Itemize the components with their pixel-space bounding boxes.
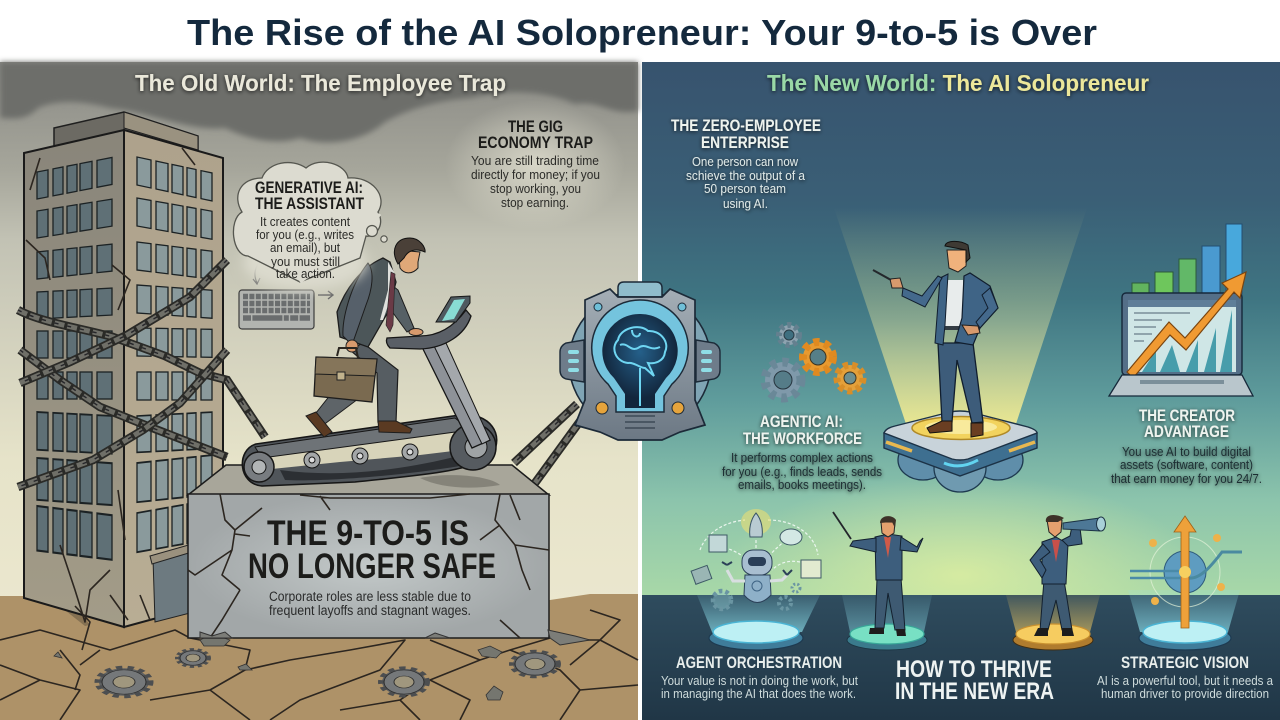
text halo: [445, 100, 625, 230]
cracked office building: [24, 112, 223, 650]
hover platform: [884, 411, 1037, 492]
top cap: [618, 282, 662, 297]
agentic body: for you (e.g., finds leads, sends: [722, 464, 882, 479]
block headline: THE 9-TO-5 IS: [267, 514, 469, 553]
assistant body: an email), but: [270, 240, 340, 255]
rubble: [54, 634, 503, 700]
gear: broken cog 4: [513, 652, 557, 676]
pill lights right: [701, 350, 712, 372]
section: agent orchestration: AGENT ORCHESTRATION: [676, 653, 842, 672]
keyboard icon: [239, 262, 333, 329]
assistant body: take action.: [276, 266, 335, 281]
callout: creator advantage: ADVANTAGE: [1144, 422, 1229, 441]
central AI brain badge: [560, 282, 720, 440]
section: agent orchestration: [661, 653, 858, 701]
callout: agentic AI: [722, 412, 882, 492]
storm clouds: [0, 62, 638, 142]
creator body: that earn money for you 24/7.: [1111, 471, 1262, 486]
gig body: stop earning.: [501, 195, 569, 210]
assistant body: [256, 214, 354, 281]
jacket right side: [955, 273, 998, 345]
man on treadmill: [306, 238, 425, 437]
gig body: [471, 153, 600, 210]
callout: creator advantage: THE CREATOR: [1139, 406, 1235, 425]
title: The Rise of the AI Solopreneur: Your 9-to-5 is Over: [187, 12, 1097, 53]
panel: the new world: [642, 62, 1280, 720]
creator body: [1111, 444, 1262, 486]
callout: the gig economy trap: [471, 117, 600, 210]
callout: zero-employee enterprise: [671, 116, 821, 211]
zero-employee body: [686, 154, 806, 211]
laptop growth chart: [1109, 224, 1253, 396]
spotlight beam: [834, 208, 1087, 430]
orchestration body: Your value is not in doing the work, but: [661, 673, 858, 688]
bulb lens: [602, 314, 678, 408]
zero-employee body: 50 person team: [704, 181, 786, 196]
main solopreneur figure: [873, 241, 998, 437]
gig body: You are still trading time: [471, 153, 599, 168]
side tab right: [696, 340, 720, 382]
pedestal: presenter with pointer: [833, 512, 932, 650]
pill lights left: [568, 350, 579, 372]
assistant heading: THE ASSISTANT: [255, 194, 365, 213]
agentic body: emails, books meetings).: [738, 477, 866, 492]
section: strategic vision: STRATEGIC VISION: [1121, 653, 1249, 672]
callout: agentic AI: THE WORKFORCE: [743, 429, 862, 448]
assistant body: It creates content: [260, 214, 350, 229]
section: strategic vision: [1097, 653, 1274, 701]
zero-employee body: using AI.: [723, 196, 768, 211]
thought bubble: generative AI: [233, 162, 387, 290]
block headline line two: NO LONGER SAFE: [248, 547, 496, 586]
assistant body: you must still: [271, 254, 340, 269]
ground: [0, 594, 638, 720]
bulb ring: [592, 300, 688, 412]
pedestal: agent orchestration with robot: [691, 509, 821, 650]
telescope: [1063, 518, 1100, 531]
panel heading: The New World: The AI Solopreneur: [767, 70, 1149, 96]
gear: broken cog 1: [99, 668, 149, 696]
gear: broken cog 3: [382, 669, 426, 695]
orchestration body: in managing the AI that does the work.: [661, 686, 856, 701]
steel housing: [575, 289, 705, 440]
gears: [765, 325, 863, 398]
far arm: [388, 282, 414, 332]
orchestration body: [661, 673, 858, 701]
treadmill: [242, 296, 497, 486]
assistant body: for you (e.g., writes: [256, 227, 354, 242]
creator body: You use AI to build digital: [1122, 444, 1251, 459]
agentic body: [722, 450, 882, 492]
gig body: directly for money; if you: [471, 167, 600, 182]
panel heading: The Old World: The Employee Trap: [135, 70, 506, 96]
panel: the old world: [0, 62, 638, 720]
briefcase: [314, 348, 377, 402]
block body: Corporate roles are less stable due to: [269, 589, 471, 604]
bottom band: [642, 595, 1280, 720]
callout: zero-employee enterprise: THE ZERO-EMPLOYEE: [671, 116, 821, 135]
concrete block: [188, 465, 590, 645]
orange rivets: [596, 402, 684, 414]
backing disc: [569, 291, 711, 433]
section heading: how to thrive: HOW TO THRIVE: [896, 656, 1052, 683]
callout: zero-employee enterprise: ENTERPRISE: [701, 133, 789, 152]
creator body: assets (software, content): [1120, 457, 1253, 472]
pedestal: visionary with telescope: [1006, 515, 1106, 650]
callout: creator advantage: [1111, 406, 1262, 486]
gear: broken cog 2: [178, 650, 208, 666]
strategic body: [1097, 673, 1274, 701]
jacket left side: [935, 274, 948, 345]
callout: agentic AI: AGENTIC AI:: [760, 412, 843, 431]
side tab left: [560, 340, 584, 382]
zero-employee body: schieve the output of a: [686, 168, 806, 183]
assistant heading: [255, 178, 365, 213]
blue rivets: [594, 303, 686, 311]
callout: the gig economy trap: ECONOMY TRAP: [478, 133, 593, 152]
block body: [269, 589, 471, 618]
icon: brain: [614, 327, 666, 406]
section heading: how to thrive: IN THE NEW ERA: [895, 678, 1054, 705]
block body: frequent layoffs and stagnant wages.: [269, 603, 471, 618]
callout: the gig economy trap: THE GIG: [508, 117, 563, 136]
zero-employee body: One person can now: [692, 154, 799, 169]
gig body: stop working, you: [490, 181, 581, 196]
heavy chains: [18, 260, 586, 487]
assistant heading: GENERATIVE AI:: [255, 178, 363, 197]
agentic body: It performs complex actions: [731, 450, 873, 465]
pedestal: strategic vision icon: [1128, 516, 1242, 650]
vent grille: [625, 416, 655, 428]
section heading: how to thrive: [895, 656, 1054, 705]
